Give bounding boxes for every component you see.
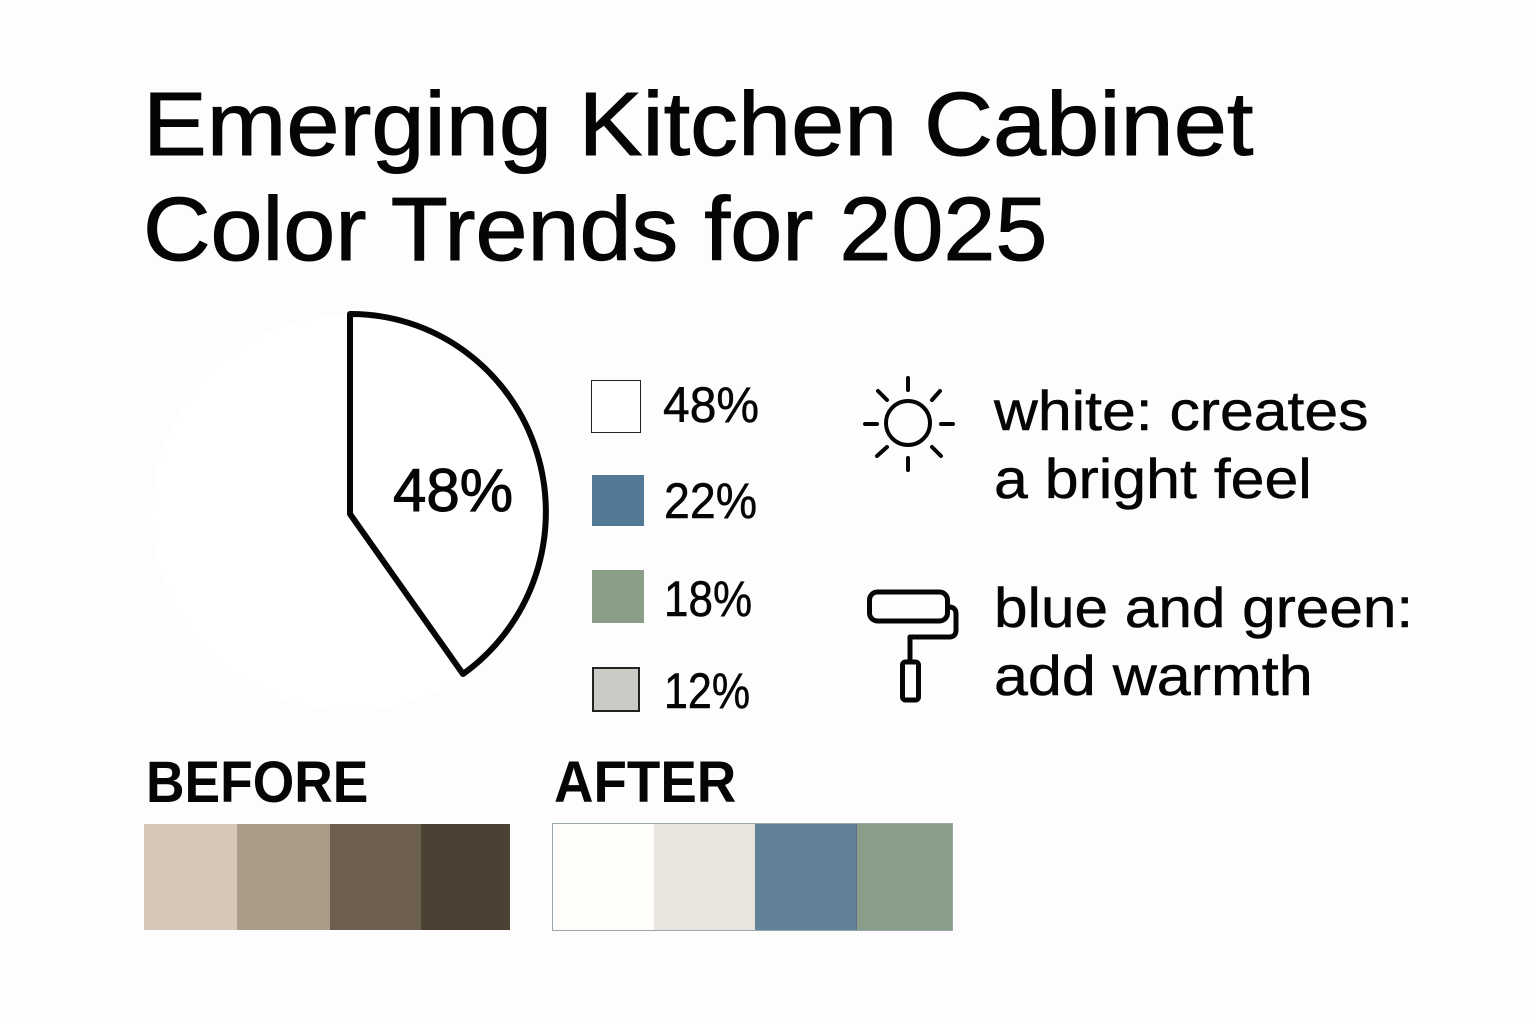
title: Emerging Kitchen Cabinet — [143, 75, 1253, 175]
legend value: 48%: 48% — [663, 377, 759, 433]
legend value: 22%: 22% — [664, 473, 757, 529]
title: Color Trends for 2025 — [143, 180, 1047, 280]
title — [143, 75, 1254, 280]
sun description: white: creates — [994, 379, 1369, 442]
legend swatch: grey — [592, 667, 640, 712]
after palette — [552, 823, 953, 931]
sun description — [994, 379, 1369, 510]
pie chart — [347, 311, 549, 677]
pie chart: 48% — [393, 457, 513, 524]
roller description: blue and green: — [994, 576, 1413, 639]
before heading: BEFORE — [146, 750, 368, 815]
roller description — [994, 576, 1413, 707]
roller description: add warmth — [994, 644, 1313, 707]
icon: sun — [863, 376, 955, 472]
icon: paint roller — [867, 590, 958, 702]
sun description: a bright feel — [994, 447, 1312, 510]
legend — [591, 377, 759, 719]
legend swatch: blue — [592, 475, 644, 526]
before palette — [144, 824, 510, 930]
legend swatch: white — [591, 380, 641, 433]
legend swatch: green — [592, 570, 644, 623]
legend value: 12%: 12% — [664, 663, 750, 719]
after heading: AFTER — [554, 750, 736, 815]
legend value: 18%: 18% — [664, 571, 752, 627]
